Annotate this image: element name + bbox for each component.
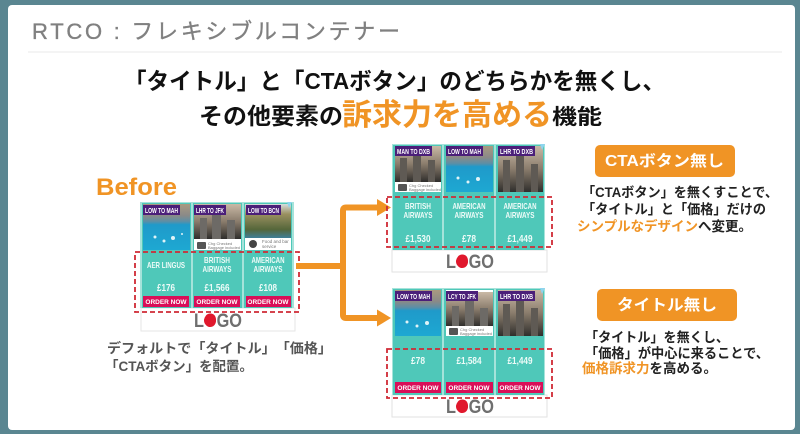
before ad banner: £176 [157, 283, 175, 294]
CTA-less ad banner: £1,449 [508, 234, 533, 245]
title-less dashed highlight [387, 349, 552, 398]
title-less ad banner: ORDER NOW [499, 385, 541, 392]
before ad banner: LOW TO BCN [248, 206, 279, 215]
before ad banner [140, 202, 295, 332]
text: no CTA description: 「タイトル」と「価格」だけの [582, 201, 766, 217]
before caption: 「CTAボタン」を配置。 [105, 359, 253, 374]
before dashed highlight [135, 252, 299, 312]
main headline: 訴求力を高める [342, 99, 552, 132]
before ad banner: LOGO [194, 311, 242, 332]
title-less ad banner: ORDER NOW [448, 385, 490, 392]
title-less ad banner: Baggage included [460, 331, 492, 336]
title-less ad banner: £78 [411, 356, 425, 367]
CTA-less ad banner: AIRWAYS [506, 210, 535, 220]
before caption [105, 340, 332, 374]
before ad banner: AER LINGUS [147, 260, 185, 270]
CTA-less ad banner: £78 [462, 234, 476, 245]
before ad banner: Food and bar [262, 239, 289, 244]
before caption: デフォルトで「タイトル」「価格」 [107, 340, 332, 356]
title-less ad banner: Chg Checked [460, 327, 484, 332]
CTA-less ad banner: BRITISH [405, 201, 431, 211]
title-less ad banner [392, 288, 547, 418]
text: no title description: 価格訴求力を高める。 [582, 360, 717, 376]
CTA-less ad banner: AMERICAN [504, 201, 536, 211]
CTA-less ad banner: LOW TO MAH [448, 147, 481, 156]
title-less ad banner: ORDER NOW [397, 385, 439, 392]
pill: no CTA button [595, 145, 735, 177]
before ad banner: Baggage included [208, 245, 240, 250]
text: no CTA description: 「CTAボタン」を無くすことで、 [582, 184, 778, 200]
pill: no CTA button: CTAボタン無し [605, 152, 724, 170]
CTA-less ad banner: LHR TO DXB [500, 147, 533, 156]
text: no title description [582, 329, 769, 376]
before ad banner: ORDER NOW [247, 299, 289, 306]
slide heading: RTCO : フレキシブルコンテナー [32, 19, 400, 44]
title-less ad banner: LHR TO DXB [500, 292, 533, 301]
main headline: その他要素の [199, 103, 343, 129]
title-less ad banner: £1,449 [508, 356, 533, 367]
before ad banner: ORDER NOW [196, 299, 238, 306]
CTA-less dashed highlight [387, 197, 552, 247]
CTA-less ad banner [392, 144, 547, 273]
before ad banner: LOW TO MAH [145, 206, 178, 215]
pill: no title: タイトル無し [617, 296, 717, 314]
before ad banner: Chg Checked [208, 241, 232, 246]
title-less ad banner: LCY TO JFK [448, 292, 476, 301]
before ad banner: LHR TO JFK [196, 206, 224, 215]
before ad banner: £108 [259, 283, 277, 294]
text: no CTA description [577, 184, 778, 234]
text: no title description: 「価格」が中心に来ることで、 [585, 345, 769, 361]
branching arrows [296, 199, 391, 326]
text: no title description: 「タイトル」を無くし、 [585, 329, 729, 345]
CTA-less ad banner: AIRWAYS [454, 210, 484, 220]
before ad banner: AIRWAYS [202, 264, 232, 274]
text: no CTA description: シンプルなデザインへ変更。 [577, 218, 752, 234]
main headline [124, 68, 665, 132]
title-less ad banner: £1,584 [456, 356, 482, 367]
before label: Before [96, 174, 177, 201]
main headline: 機能 [552, 106, 602, 129]
title-less ad banner: LOGO [446, 397, 494, 418]
title-less ad banner: LOW TO MAH [397, 292, 430, 301]
pill: no title [597, 289, 737, 321]
CTA-less ad banner: Chg Checked [409, 183, 433, 188]
CTA-less ad banner: MAN TO DXB [397, 147, 430, 156]
before ad banner: ORDER NOW [145, 299, 187, 306]
before ad banner: £1,566 [204, 283, 230, 294]
before ad banner: AIRWAYS [254, 264, 283, 274]
CTA-less ad banner: Baggage included [409, 187, 441, 192]
before ad banner: service [262, 244, 277, 249]
CTA-less ad banner: AMERICAN [452, 201, 486, 211]
before ad banner: AMERICAN [252, 255, 284, 265]
CTA-less ad banner: £1,530 [406, 234, 431, 245]
before ad banner: BRITISH [204, 255, 230, 265]
CTA-less ad banner: AIRWAYS [404, 210, 433, 220]
main headline: 「タイトル」と「CTAボタン」のどちらかを無くし、 [124, 68, 665, 94]
CTA-less ad banner: LOGO [446, 252, 494, 273]
